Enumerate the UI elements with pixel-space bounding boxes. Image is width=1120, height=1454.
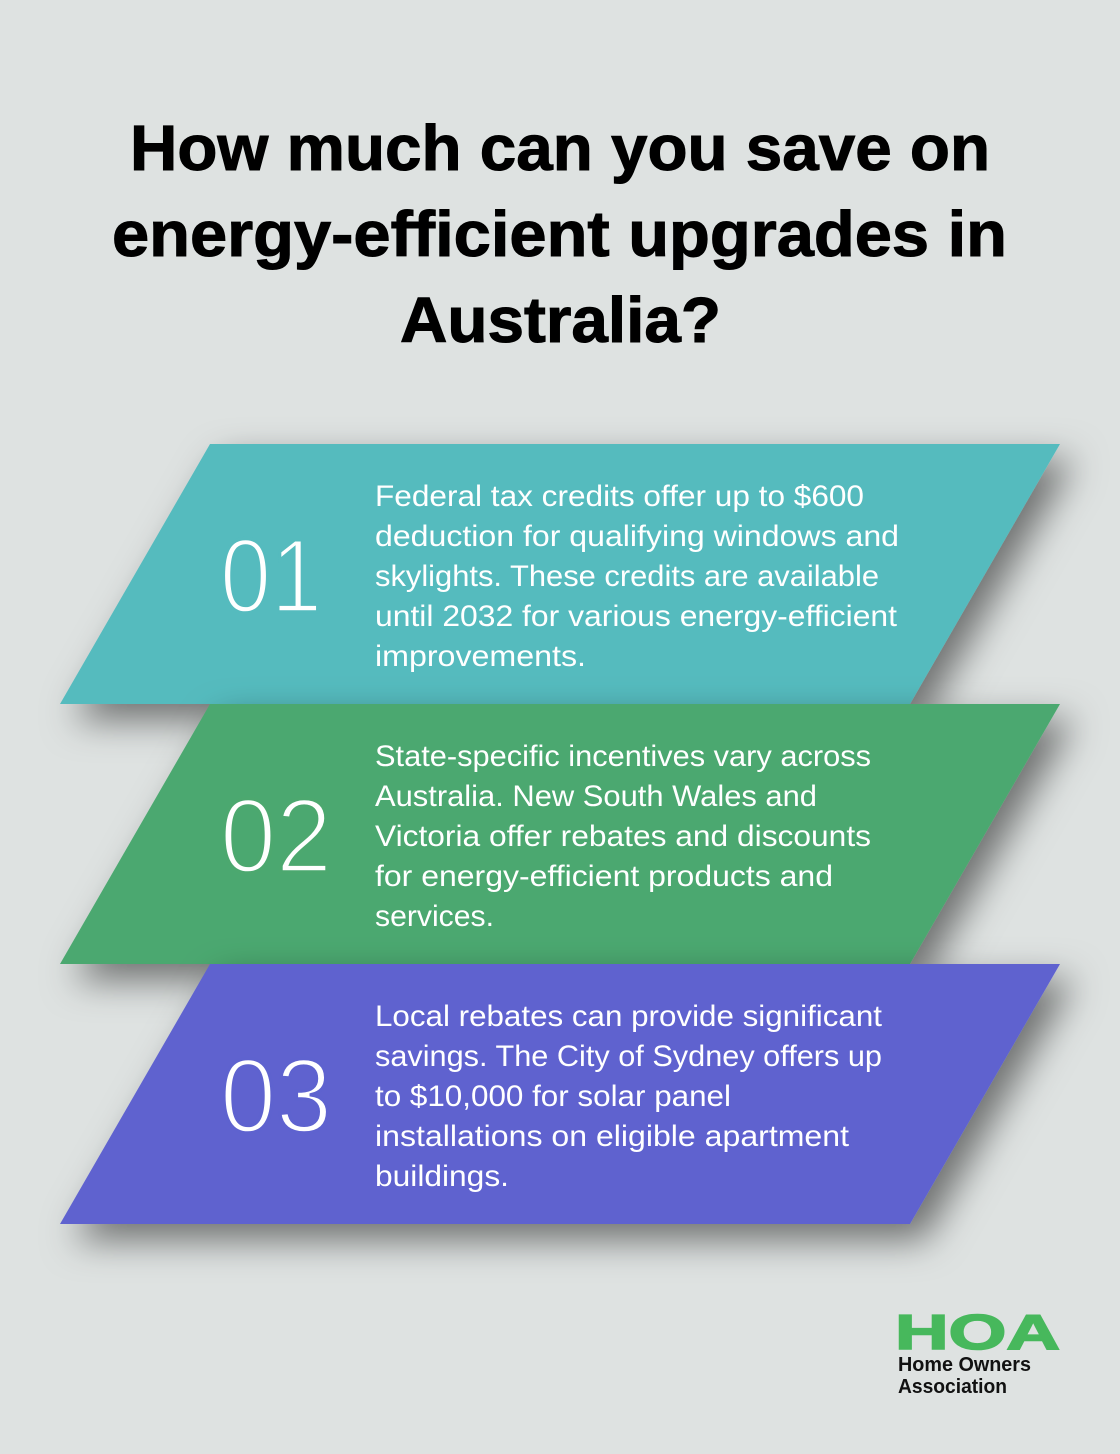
text block: state incentives	[375, 740, 871, 933]
text block: federal credits: Federal tax credits offer up to $600	[375, 480, 864, 513]
text block: federal credits: skylights. These credits are available	[375, 560, 879, 593]
text block: state incentives: State-specific incentives vary across	[375, 740, 871, 773]
title: How much can you save on	[130, 112, 990, 184]
text block: state incentives: for energy-efficient products and	[375, 860, 833, 893]
text block: local rebates: Local rebates can provide significant	[375, 1000, 883, 1033]
teal parallelogram	[60, 444, 1060, 704]
number 02: 02	[220, 778, 332, 895]
text block: local rebates: buildings.	[375, 1160, 509, 1193]
indigo parallelogram	[60, 964, 1060, 1224]
panel: step 03 local rebates	[60, 964, 1060, 1224]
title: energy-efficient upgrades in	[112, 198, 1007, 270]
number 03: 03	[220, 1038, 332, 1155]
logo: HOA Home Owners Association: Home Owners	[898, 1354, 1031, 1376]
panel: step 01 federal tax credits	[60, 444, 1060, 704]
text block: state incentives: Australia. New South Wales and	[375, 780, 817, 813]
text block: federal credits: deduction for qualifying windows and	[375, 520, 899, 553]
text block: local rebates: installations on eligible apartment	[375, 1120, 850, 1153]
panel: step 02 state incentives	[60, 704, 1060, 964]
title: Australia?	[400, 284, 721, 356]
logo: HOA Home Owners Association: HOA	[895, 1306, 1060, 1360]
text block: local rebates	[375, 1000, 883, 1193]
text block: state incentives: Victoria offer rebates and discounts	[375, 820, 871, 853]
green parallelogram	[60, 704, 1060, 964]
logo: HOA Home Owners Association	[895, 1306, 1060, 1398]
text block: federal credits: until 2032 for various energy-efficient	[375, 600, 898, 633]
text block: local rebates: savings. The City of Sydney offers up	[375, 1040, 882, 1073]
text block: federal credits: improvements.	[375, 640, 586, 673]
text block: federal credits	[375, 480, 899, 673]
logo: HOA Home Owners Association: Association	[898, 1376, 1007, 1398]
number 01: 01	[220, 518, 322, 635]
text block: local rebates: to $10,000 for solar panel	[375, 1080, 731, 1113]
text block: state incentives: services.	[375, 900, 494, 933]
title	[112, 112, 1007, 356]
